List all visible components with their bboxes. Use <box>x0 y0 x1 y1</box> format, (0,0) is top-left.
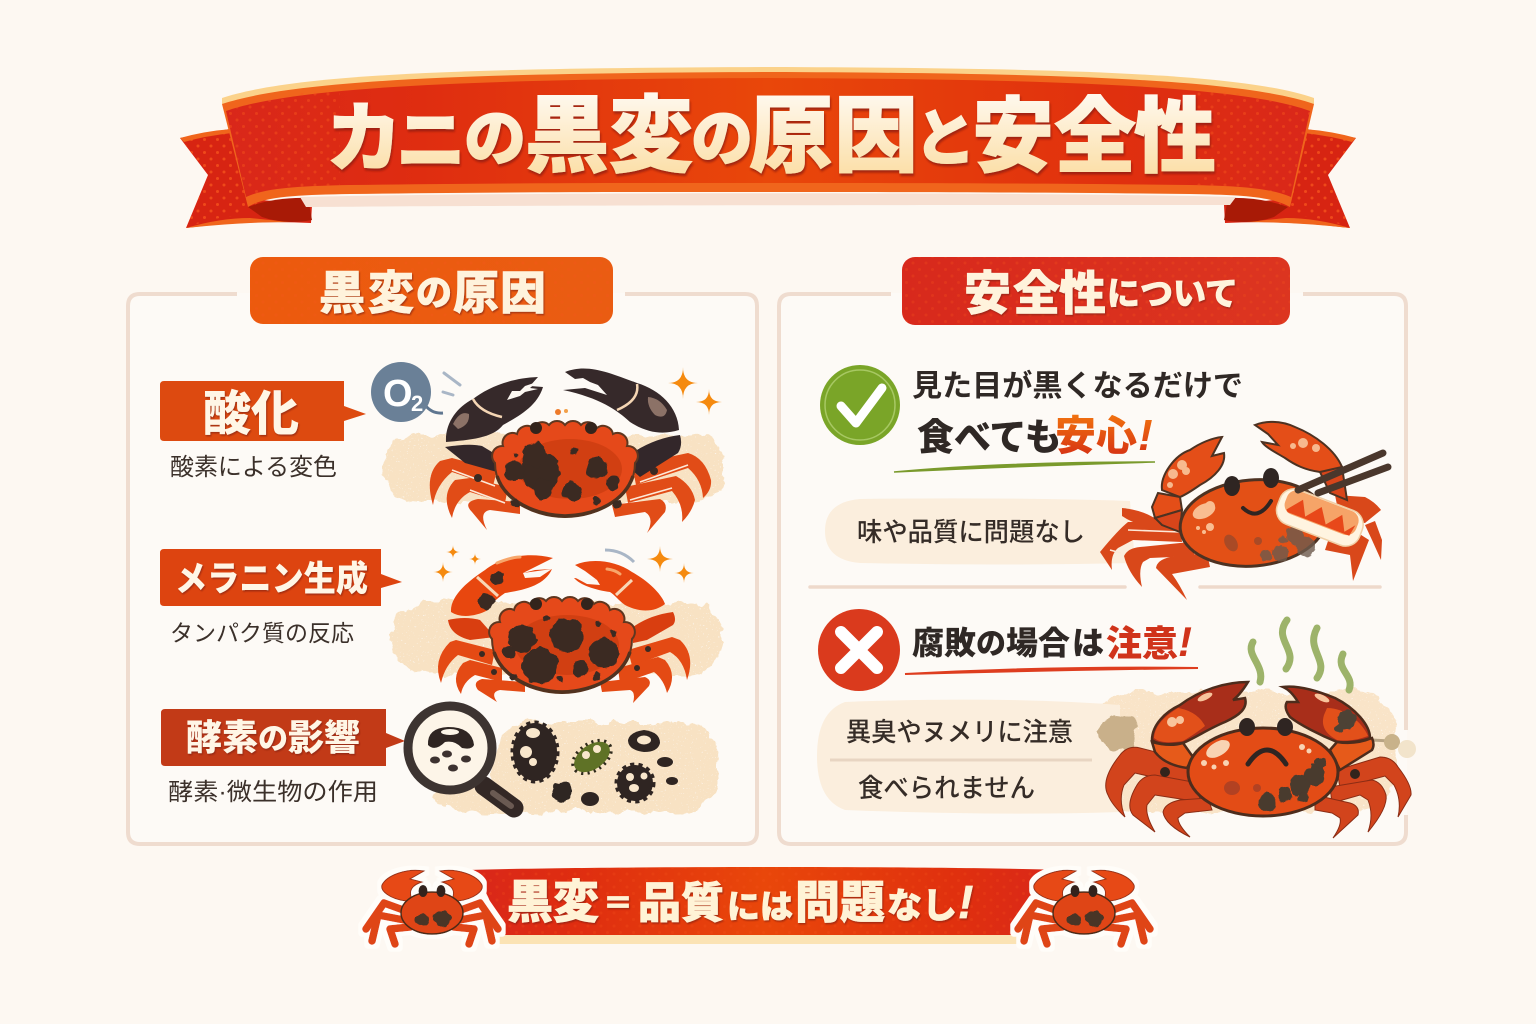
left claw <box>1152 682 1248 768</box>
ribbon right tail <box>1224 128 1356 228</box>
cause 2: description: タンパク質の反応 <box>170 620 354 646</box>
warning heading: 腐敗 <box>912 625 976 661</box>
title text: と <box>914 105 976 174</box>
ribbon shadow <box>300 193 1236 207</box>
title text: 原 <box>749 89 833 183</box>
carapace <box>489 597 635 693</box>
carapace <box>1188 728 1338 816</box>
panel: causes <box>127 257 758 845</box>
cause 3: enzyme label: の <box>258 723 288 756</box>
safe statement line 2: ! <box>1138 411 1153 460</box>
icon: spoiled crab <box>1106 682 1411 838</box>
title text: 性 <box>1134 92 1216 183</box>
cause 1: oxidation label: 酸化 <box>203 388 299 441</box>
icon: happy crab with crab meat <box>1100 422 1388 600</box>
title text: 変 <box>609 89 693 183</box>
icon: oxygen bubble <box>371 362 460 422</box>
warning note pill <box>817 700 1120 814</box>
banner text: 黒変 <box>507 876 599 928</box>
right raised claw <box>1255 422 1347 500</box>
dark spots <box>503 615 619 684</box>
cause 3: beige background <box>432 722 718 813</box>
icon: cross mark <box>818 609 900 691</box>
title text: ニ <box>396 102 466 180</box>
cause 3: description: 酵素·微生物の作用 <box>168 779 378 806</box>
right black claw <box>563 368 681 477</box>
banner gold strip <box>492 934 1025 944</box>
title text: 安 <box>972 92 1054 183</box>
icon: check mark <box>820 365 900 445</box>
banner text: 品質 <box>638 880 724 928</box>
cause 2: melanin label: メラニン生成 <box>175 559 368 599</box>
safe statement line 2: 安心 <box>1055 413 1137 459</box>
icon: odor steam <box>1251 620 1350 690</box>
face <box>1239 718 1255 736</box>
warning heading: 場合 <box>1006 625 1070 661</box>
warning heading: 注意 <box>1106 623 1178 664</box>
title ribbon <box>180 67 1356 228</box>
panel heading: 変 <box>368 267 414 319</box>
icon: left mini crab <box>366 870 498 944</box>
warning note pill: 食べられません <box>858 773 1035 803</box>
title text: の <box>691 105 753 174</box>
title text: の <box>464 105 526 174</box>
panel heading: 黒 <box>319 267 365 319</box>
panel heading: 安 <box>964 267 1011 320</box>
right claw <box>1283 687 1374 770</box>
face <box>1224 476 1240 496</box>
cause 2: beige background <box>392 602 722 674</box>
divider <box>810 585 1380 589</box>
icon: blackened crab <box>430 368 711 533</box>
panel background and border <box>127 293 758 845</box>
panel heading: について <box>1107 275 1238 312</box>
icon: right mini crab <box>1018 870 1150 944</box>
warning heading: ! <box>1178 618 1192 665</box>
warning heading: は <box>1072 625 1104 661</box>
crab meat <box>1272 484 1368 551</box>
ribbon band <box>222 67 1314 207</box>
left black claw <box>445 377 543 472</box>
safe statement line 2: 食べても <box>917 417 1062 458</box>
cause 3: enzyme label <box>161 709 405 766</box>
right claw <box>574 561 675 643</box>
cause 1: description: 酸素による変色 <box>170 454 337 481</box>
panel heading <box>902 257 1290 325</box>
dark patch <box>1259 756 1326 812</box>
icon: crab with melanin spots <box>438 555 690 703</box>
title text: 因 <box>834 89 918 183</box>
taste note pill <box>825 498 1135 564</box>
title text: カ <box>326 97 402 182</box>
panel heading: の <box>416 272 452 313</box>
title text: 全 <box>1054 92 1136 183</box>
banner text: 問題 <box>795 877 885 928</box>
carapace <box>492 421 638 517</box>
icon: odor trail <box>1372 734 1416 758</box>
banner text: ! <box>958 876 973 928</box>
green underline <box>894 462 1155 472</box>
bottom banner <box>366 867 1150 944</box>
sparkles: melanin <box>433 545 694 583</box>
icon: oxygen bubble: O <box>383 373 413 415</box>
cause 3: enzyme label: 酵素 <box>186 717 258 758</box>
motion arc <box>605 550 634 562</box>
banner band <box>468 867 1061 935</box>
banner text: なし <box>887 887 957 926</box>
banner text: には <box>727 888 793 925</box>
icon: oxygen bubble: 2 <box>411 391 423 416</box>
banner text: ＝ <box>603 888 633 921</box>
safe statement line 1: 見た目が黒くなるだけで <box>912 369 1243 403</box>
green microbe <box>569 736 615 778</box>
ribbon left tail <box>180 128 312 228</box>
panel heading: 原 <box>453 267 499 319</box>
warning heading: の <box>976 628 1006 661</box>
sparkles: oxidation <box>668 367 722 415</box>
red underline <box>905 668 1198 674</box>
icon: microbes <box>513 723 678 806</box>
warning note pill: 異臭やヌメリに注意 <box>846 717 1073 747</box>
title text: 黒 <box>525 89 609 183</box>
panel heading <box>250 257 613 324</box>
panel background and border <box>778 293 1407 845</box>
panel heading: 性 <box>1059 267 1106 320</box>
taste note pill: 味や品質に問題なし <box>857 517 1085 547</box>
left claw <box>448 555 553 640</box>
cause 3: enzyme label: 影響 <box>288 717 360 758</box>
cause 1: oxidation label <box>160 381 366 441</box>
chopsticks <box>1298 453 1388 493</box>
dim patch <box>1259 526 1315 562</box>
icon: odor stain <box>1097 716 1137 750</box>
warning beige background <box>1090 692 1395 810</box>
cause 2: melanin label <box>160 549 402 606</box>
icon: magnifying glass <box>408 706 514 808</box>
panel heading: 全 <box>1013 267 1060 320</box>
cause 1: beige background <box>385 434 725 502</box>
panel: safety <box>778 257 1416 845</box>
dark spots <box>504 443 621 508</box>
left raised claw <box>1152 437 1224 532</box>
panel heading: 因 <box>500 267 546 319</box>
carapace <box>1177 474 1329 572</box>
